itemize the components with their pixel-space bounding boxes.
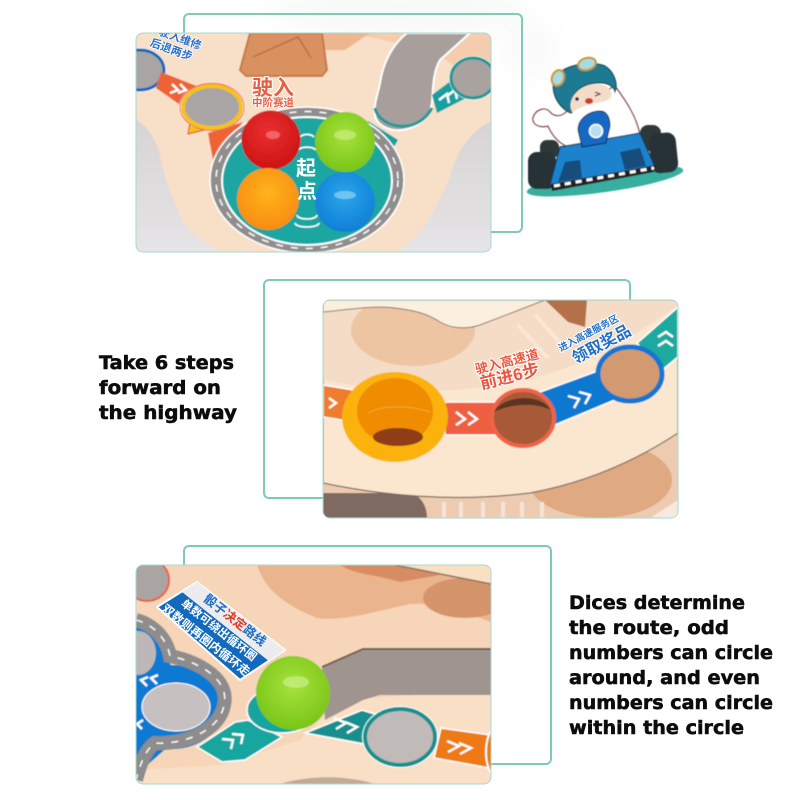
panel border — [136, 33, 491, 252]
orange ball — [237, 168, 299, 230]
label: start — [296, 157, 317, 203]
faint background photo glow — [270, 0, 560, 82]
grey slot — [375, 33, 470, 130]
panel border — [323, 300, 678, 518]
panel: start position with four balls — [114, 14, 522, 253]
caption: dice route: around, and even — [569, 667, 760, 689]
sign heading: 骰子决定路线 — [201, 591, 270, 649]
yellow hole — [188, 122, 204, 134]
red ball — [242, 110, 300, 170]
label: back steps: 驶入维修 — [157, 24, 203, 52]
road loop — [136, 620, 225, 780]
brown hill shading — [257, 565, 491, 622]
panel: highway track — [264, 280, 678, 518]
board surface — [323, 300, 678, 498]
road ring — [210, 107, 404, 253]
grey slot — [322, 650, 491, 720]
caption: dice route: the route, odd — [569, 617, 729, 639]
front wheels — [528, 132, 679, 189]
lower area below board — [323, 430, 678, 518]
sign line two: 双数则再圈内循环走 — [159, 601, 253, 679]
panel: dice route — [120, 546, 551, 784]
label: back steps: 后退两步 — [148, 35, 194, 63]
instruction sign — [157, 582, 285, 680]
board photo — [136, 566, 490, 784]
panel outline frame — [184, 14, 522, 232]
panel outline frame — [264, 280, 630, 498]
caption: dice route: numbers can circle — [569, 692, 773, 714]
label: collect prize: 领取奖品 — [569, 321, 634, 368]
caption: highway: forward on — [99, 377, 221, 399]
caption: dice route: Dices determine — [569, 592, 745, 614]
lower light band — [136, 690, 491, 784]
car body — [550, 133, 655, 185]
checkered strip — [551, 165, 656, 191]
teal lanes — [197, 720, 282, 762]
label: drive in: 驶入 — [252, 77, 294, 100]
orange lane — [434, 728, 491, 768]
panel outline frame — [184, 546, 551, 764]
mascot racing car icon — [525, 56, 685, 203]
label: enter highway: 驶入高速道 — [474, 346, 540, 377]
sign — [240, 33, 327, 76]
green ball — [315, 112, 375, 172]
rear wheels — [540, 125, 661, 158]
caption: dice route: within the circle — [569, 717, 744, 739]
caption: dice route: numbers can circle — [569, 642, 773, 664]
blue ball — [315, 172, 375, 232]
board photo — [323, 294, 678, 518]
red hole — [492, 390, 554, 446]
orange ring — [342, 372, 448, 462]
label: service area: 进入高速服务区 — [556, 312, 621, 354]
teal lane and hole — [432, 80, 468, 113]
caption: highway — [99, 352, 238, 424]
label: back steps — [148, 34, 203, 60]
board photo — [136, 34, 490, 252]
panel border — [136, 565, 491, 784]
label: forward 6 steps: 前进6步 — [478, 359, 541, 393]
teal start circle — [222, 117, 392, 245]
cockpit — [578, 111, 610, 147]
teal hole — [362, 706, 438, 768]
caption: highway: Take 6 steps — [99, 352, 234, 374]
label: start: 点 — [297, 180, 317, 203]
caption: highway: the highway — [99, 402, 238, 424]
top-left hole — [136, 566, 170, 602]
sign line one: 单数可绕出循环圈 — [178, 596, 260, 664]
hole in loop — [142, 683, 210, 731]
face — [570, 84, 611, 112]
helmet — [553, 63, 616, 113]
label: intermediate track: 中阶赛道 — [252, 96, 294, 109]
green ball — [256, 656, 330, 730]
goggles — [577, 56, 597, 72]
left hole — [136, 48, 166, 92]
ground shadow — [525, 159, 685, 203]
blue loop — [136, 664, 219, 750]
mascot body — [533, 86, 640, 146]
caption: dice route — [569, 592, 773, 739]
label: start: 起 — [296, 157, 316, 180]
orange lane — [156, 72, 196, 104]
lanes — [324, 384, 354, 422]
blue hole — [598, 347, 662, 401]
teal oval under ball — [247, 687, 317, 733]
